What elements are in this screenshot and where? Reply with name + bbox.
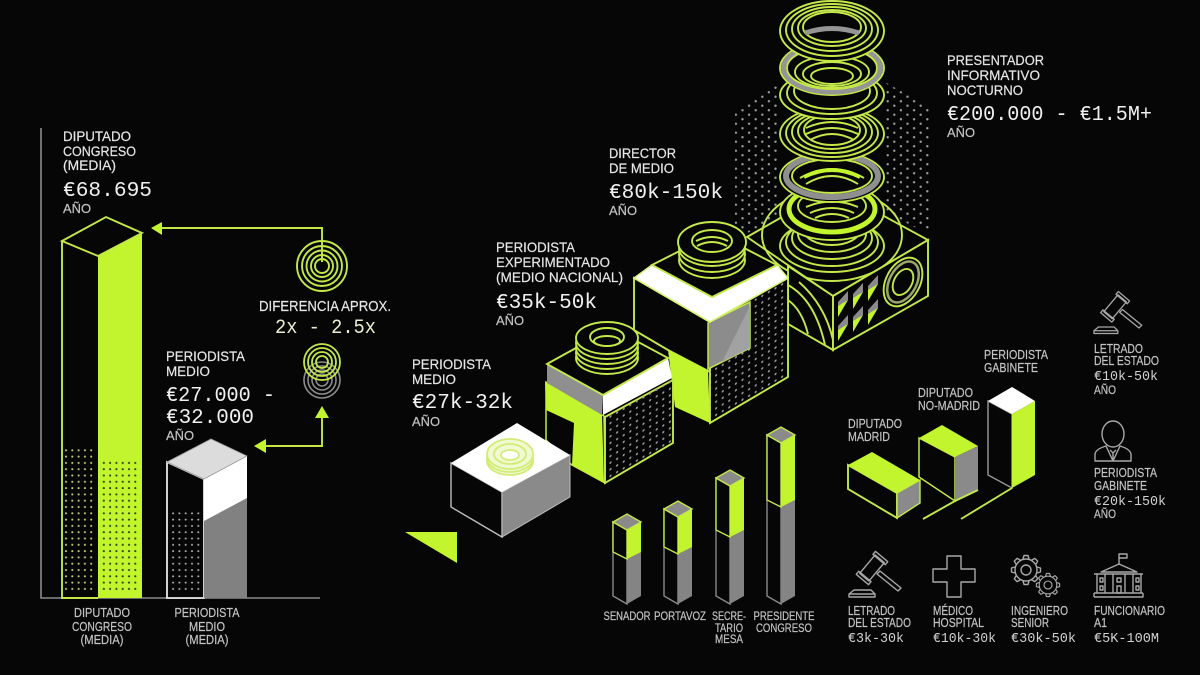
text: diferencia aprox: 2x - 2.5x	[275, 317, 376, 340]
label: periodista experimentado: EXPERIMENTADO	[496, 254, 610, 270]
big block: presentador	[747, 189, 930, 350]
label: presentador informativo	[947, 52, 1152, 140]
label: presentador informativo: €200.000 - €1.5M+	[947, 104, 1152, 127]
chart axes	[41, 128, 320, 598]
text: medico	[933, 603, 996, 647]
label: periodista medio: MEDIO	[166, 363, 210, 379]
label: director de medio: DE MEDIO	[609, 160, 674, 176]
label: periodista medio (isometric)	[412, 356, 513, 429]
small bar labels	[604, 609, 814, 646]
iso labels: GABINETE	[984, 360, 1038, 375]
small bar labels: TARIO	[715, 621, 743, 635]
text: medico: HOSPITAL	[933, 615, 984, 630]
disc: middle	[780, 107, 884, 161]
text: periodista gabinete right: PERIODISTA	[1094, 465, 1157, 480]
text: letrado del estado right: LETRADO	[1094, 341, 1143, 356]
text: letrado bottom	[848, 603, 911, 647]
text: letrado del estado right: €10k-50k	[1094, 370, 1158, 385]
text: letrado del estado right	[1094, 341, 1159, 397]
text: ingeniero: SENIOR	[1011, 615, 1049, 630]
small bar: senador	[613, 514, 641, 604]
text: periodista gabinete right: AÑO	[1094, 507, 1116, 521]
text: ingeniero	[1011, 603, 1076, 647]
text: funcionario: €5K-100M	[1094, 632, 1159, 647]
label: periodista medio (isometric): €27k-32k	[412, 392, 513, 415]
text: letrado del estado right: AÑO	[1094, 383, 1116, 397]
iso block: diputado no-madrid	[919, 425, 978, 519]
label: presentador informativo: INFORMATIVO	[947, 67, 1040, 83]
text: periodista gabinete right	[1094, 465, 1166, 521]
label: diputado congreso: AÑO	[63, 201, 91, 216]
label: periodista experimentado: AÑO	[496, 313, 524, 328]
disc: lime band	[780, 184, 884, 240]
iso labels: DIPUTADO	[918, 385, 973, 400]
iso block: periodista gabinete	[961, 387, 1035, 519]
rings: periodista marker	[304, 344, 340, 398]
axis labels: (MEDIA)	[186, 632, 228, 647]
label: periodista medio	[166, 348, 275, 443]
disc: gray ring	[780, 41, 884, 95]
dot fields behind tower	[735, 82, 930, 240]
icon: gavel right	[1094, 291, 1142, 333]
axis labels	[72, 605, 240, 647]
text: periodista gabinete right: GABINETE	[1094, 478, 1147, 493]
axis labels: CONGRESO	[72, 619, 132, 634]
icon: gavel bottom	[849, 551, 901, 597]
small bar labels: PRESIDENTE	[754, 609, 814, 623]
small bar labels: SENADOR	[604, 609, 651, 623]
label: director de medio: DIRECTOR	[609, 145, 676, 161]
small bar: presidente congreso	[767, 427, 795, 604]
label: director de medio: €80k-150k	[609, 182, 723, 205]
text: periodista gabinete right: €20k-150k	[1094, 495, 1166, 510]
text: funcionario: FUNCIONARIO	[1094, 603, 1165, 618]
label: diputado congreso: CONGRESO	[63, 143, 136, 159]
label: presentador informativo: NOCTURNO	[947, 82, 1023, 98]
small bar labels: MESA	[715, 632, 743, 646]
iso labels: PERIODISTA	[984, 347, 1048, 362]
small bar labels: PORTAVOZ	[654, 609, 706, 623]
arrow: to diputado	[151, 222, 322, 262]
label: periodista experimentado: (MEDIO NACIONAL)	[496, 269, 623, 285]
label: diputado congreso: (MEDIA)	[63, 157, 116, 173]
text: ingeniero: INGENIERO	[1011, 603, 1068, 618]
disc: lower upper	[780, 71, 884, 119]
label: periodista medio (isometric): PERIODISTA	[412, 356, 492, 372]
label: periodista experimentado: €35k-50k	[496, 292, 597, 315]
disc: base	[780, 215, 884, 272]
disc: gray band	[780, 152, 884, 202]
label: periodista medio: €32.000	[166, 407, 254, 430]
label: diputado congreso: €68.695	[63, 180, 152, 203]
label: diputado congreso	[63, 128, 152, 216]
disc: top	[780, 1, 884, 61]
small bar labels: CONGRESO	[756, 621, 812, 635]
block: periodista experimentado	[545, 322, 673, 483]
text: letrado bottom: DEL ESTADO	[848, 615, 911, 630]
text: diferencia aprox: DIFERENCIA APROX.	[259, 298, 391, 315]
bar: diputado congreso	[62, 217, 142, 598]
iso labels: DIPUTADO	[848, 416, 902, 431]
icon: medical cross	[933, 556, 975, 597]
label: diputado congreso: DIPUTADO	[63, 128, 131, 144]
label: periodista medio (isometric): MEDIO	[412, 371, 456, 387]
text: funcionario: A1	[1094, 615, 1107, 630]
text: medico: MÉDICO	[933, 603, 973, 618]
iso labels: NO-MADRID	[918, 398, 980, 413]
icon: gears	[1012, 556, 1060, 597]
text: ingeniero: €30k-50k	[1011, 632, 1076, 647]
ring stack: experimentado	[576, 322, 638, 374]
axis labels: PERIODISTA	[174, 605, 240, 620]
text: diferencia aprox	[259, 298, 391, 340]
axis labels: MEDIO	[189, 619, 225, 634]
text: funcionario	[1094, 603, 1165, 647]
bar: periodista medio	[167, 439, 247, 598]
label: director de medio: AÑO	[609, 203, 637, 218]
axis labels: (MEDIA)	[80, 632, 124, 647]
small bar: portavoz	[664, 501, 692, 604]
label: periodista experimentado: PERIODISTA	[496, 239, 576, 255]
ring tower	[780, 1, 884, 272]
label: periodista medio: €27.000 -	[166, 385, 275, 408]
text: letrado bottom: LETRADO	[848, 603, 895, 618]
label: director de medio	[609, 145, 723, 218]
small bar: secretario mesa	[716, 470, 744, 604]
decorative triangle	[405, 532, 457, 563]
text: letrado del estado right: DEL ESTADO	[1094, 353, 1159, 368]
label: periodista medio: PERIODISTA	[166, 348, 246, 364]
icon: person	[1095, 421, 1131, 461]
arrow: to periodista	[254, 406, 329, 453]
block: periodista medio	[451, 423, 570, 537]
icon: building	[1094, 554, 1143, 597]
ring stack: director	[678, 222, 746, 278]
iso labels	[848, 347, 1048, 444]
axis labels: DIPUTADO	[74, 605, 130, 620]
label: presentador informativo: PRESENTADOR	[947, 52, 1044, 68]
small bar labels: SECRE-	[712, 609, 746, 623]
iso block: diputado madrid	[848, 452, 920, 518]
ring: pale on white	[487, 439, 533, 475]
iso labels: MADRID	[848, 429, 890, 444]
label: periodista medio (isometric): AÑO	[412, 414, 440, 429]
text: medico: €10k-30k	[933, 632, 996, 647]
block: director de medio	[634, 222, 788, 423]
rings: diputado marker	[297, 241, 347, 291]
label: periodista experimentado	[496, 239, 623, 328]
label: periodista medio: AÑO	[166, 428, 194, 443]
text: letrado bottom: €3k-30k	[848, 632, 904, 647]
label: presentador informativo: AÑO	[947, 125, 975, 140]
